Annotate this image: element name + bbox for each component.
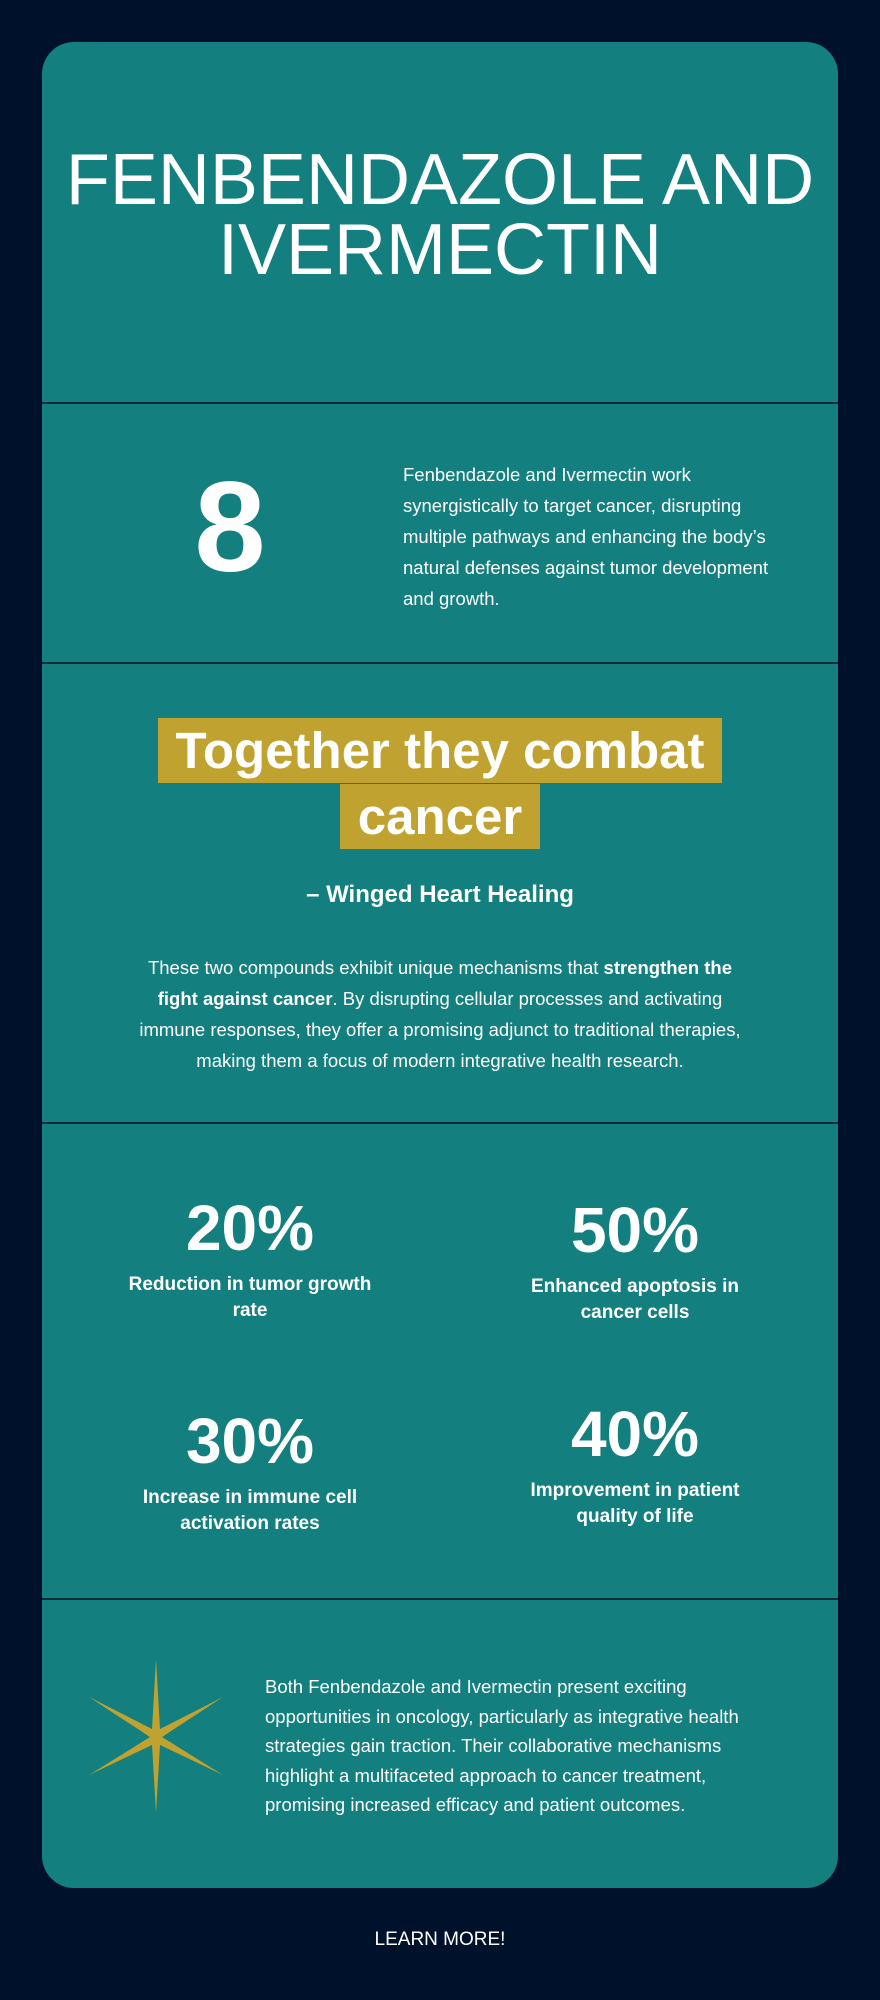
stat 30%: Increase in immune cell	[143, 1487, 357, 1508]
learn more link: LEARN MORE!	[375, 1929, 505, 1950]
title: IVERMECTIN	[218, 210, 662, 290]
title	[66, 140, 814, 290]
stat 20%: rate	[233, 1300, 267, 1321]
stats grid	[129, 1192, 740, 1534]
body text: fight against cancer. By disrupting cellular processes and activating immune responses, they offer a promising adjunct to traditional therapies, making them a focus of modern integrative health research.	[139, 988, 741, 1071]
stat 20%: Reduction in tumor growth	[129, 1274, 371, 1295]
stat 30%: activation rates	[180, 1513, 320, 1534]
intro text: Fenbendazole and Ivermectin work synergistically to target cancer, disrupting multiple pathways and enhancing the body’s natural defenses against tumor development and growth.	[403, 464, 768, 609]
stat 40%: 40%	[571, 1398, 699, 1470]
stat 50%: 50%	[571, 1194, 699, 1266]
stat 50%: Enhanced apoptosis in	[531, 1276, 739, 1297]
stat 50%	[531, 1194, 739, 1323]
big number 8: 8	[194, 456, 266, 599]
stat 30%	[143, 1405, 357, 1534]
icon: gold star	[89, 1660, 223, 1812]
attribution: – Winged Heart Healing	[306, 881, 574, 908]
highlighted heading: cancer	[358, 788, 522, 845]
stat 20%: 20%	[186, 1192, 314, 1264]
stat 50%: cancer cells	[581, 1302, 689, 1323]
closing text: Both Fenbendazole and Ivermectin present exciting opportunities in oncology, particularly as integrative health strategies gain traction. Their collaborative mechanisms highlight a multifaceted approach to cancer treatment, promising increased efficacy and patient outcomes.	[265, 1676, 739, 1815]
stat 40%: Improvement in patient	[530, 1480, 740, 1501]
stat 30%: 30%	[186, 1405, 314, 1477]
highlighted heading	[158, 718, 722, 849]
stat 20%	[129, 1192, 371, 1321]
stat 40%	[530, 1398, 740, 1527]
highlighted heading: Together they combat	[176, 722, 704, 779]
body text: These two compounds exhibit unique mechanisms that strengthen the	[148, 957, 732, 978]
title: FENBENDAZOLE AND	[66, 140, 814, 220]
stat 40%: quality of life	[576, 1506, 694, 1527]
